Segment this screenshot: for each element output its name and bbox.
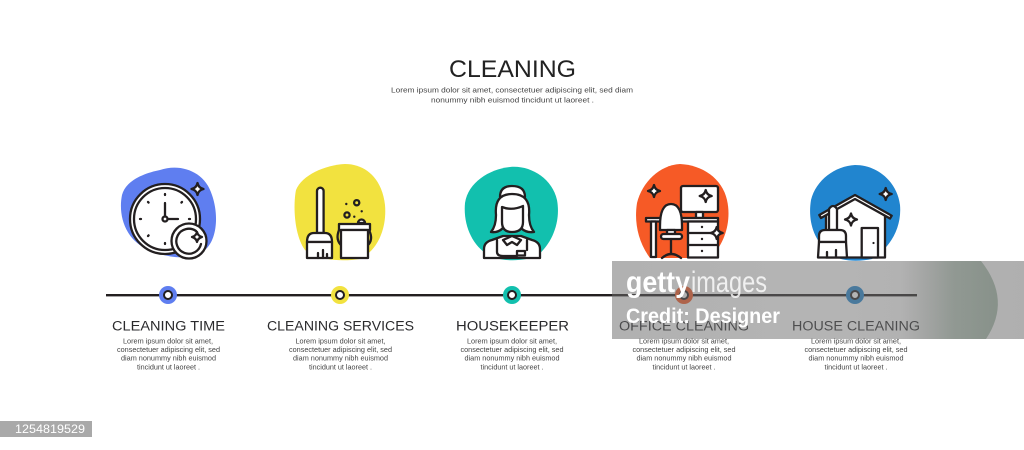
timeline dot: [159, 286, 177, 304]
icon: clock: [130, 183, 206, 258]
body text: consectetuer adipiscing elit, sed: [632, 345, 736, 354]
heading: OFFICE CLEANING: [619, 318, 749, 334]
body text: tincidunt ut laoreet .: [652, 362, 716, 372]
body text: diam nonummy nibh euismod: [121, 354, 216, 362]
blob: blue: [121, 168, 216, 257]
body text: tincidunt ut laoreet .: [137, 362, 200, 372]
blob: orange: [636, 164, 728, 258]
icon: housekeeper: [484, 186, 540, 258]
timeline dot: [675, 286, 693, 304]
timeline dot: [331, 286, 349, 304]
image id tag: 1254819529: [15, 424, 85, 436]
panel: cleaning services: [267, 164, 414, 372]
watermark band: [612, 261, 1024, 339]
body text: consectetuer adipiscing elit, sed: [460, 345, 564, 354]
panel: house cleaning: [792, 165, 920, 372]
icon: house and brush: [818, 188, 892, 258]
body text: diam nonummy nibh euismod: [464, 354, 560, 362]
body text: tincidunt ut laoreet .: [309, 362, 372, 372]
body text: tincidunt ut laoreet .: [480, 362, 544, 372]
blob: yellow: [295, 164, 385, 260]
timeline line: [106, 294, 917, 296]
icon: office desk: [646, 185, 723, 258]
intro text: [391, 86, 633, 104]
blob: blue: [810, 165, 900, 261]
body text: [804, 336, 908, 372]
body text: [460, 336, 564, 372]
body text: [632, 336, 736, 372]
body text: Lorem ipsum dolor sit amet,: [296, 336, 386, 346]
heading: CLEANING SERVICES: [267, 318, 414, 334]
watermark credit: Credit: Designer: [626, 305, 780, 328]
body text: consectetuer adipiscing elit, sed: [289, 345, 392, 354]
timeline dot: [846, 286, 864, 304]
icon: broom and bucket: [307, 188, 371, 258]
body text: diam nonummy nibh euismod: [636, 354, 732, 362]
heading: CLEANING TIME: [112, 318, 225, 334]
title: CLEANING: [449, 56, 576, 83]
panel: housekeeper: [456, 167, 569, 372]
watermark logo: images: [691, 266, 767, 299]
panel: office cleaning: [619, 164, 749, 372]
body text: consectetuer adipiscing elit, sed: [117, 345, 220, 354]
body text: diam nonummy nibh euismod: [293, 354, 388, 362]
panel: cleaning time: [112, 168, 225, 372]
body text: consectetuer adipiscing elit, sed: [804, 345, 908, 354]
heading: HOUSEKEEPER: [456, 318, 569, 334]
body text: Lorem ipsum dolor sit amet,: [811, 336, 901, 346]
timeline dot: [503, 286, 521, 304]
body text: tincidunt ut laoreet .: [824, 362, 888, 372]
watermark logo: [626, 266, 767, 299]
body text: diam nonummy nibh euismod: [808, 354, 904, 362]
body text: Lorem ipsum dolor sit amet,: [467, 336, 557, 346]
watermark logo: getty: [626, 266, 690, 299]
body text: [289, 336, 392, 372]
body text: Lorem ipsum dolor sit amet,: [123, 336, 213, 346]
intro text: Lorem ipsum dolor sit amet, consectetuer adipiscing elit, sed diam: [391, 86, 633, 94]
image id tag: [0, 421, 92, 437]
blob: teal: [465, 167, 558, 260]
intro text: nonummy nibh euismod tincidunt ut laoreet .: [431, 96, 594, 104]
heading: HOUSE CLEANING: [792, 318, 920, 334]
body text: Lorem ipsum dolor sit amet,: [639, 336, 729, 346]
body text: [117, 336, 220, 372]
